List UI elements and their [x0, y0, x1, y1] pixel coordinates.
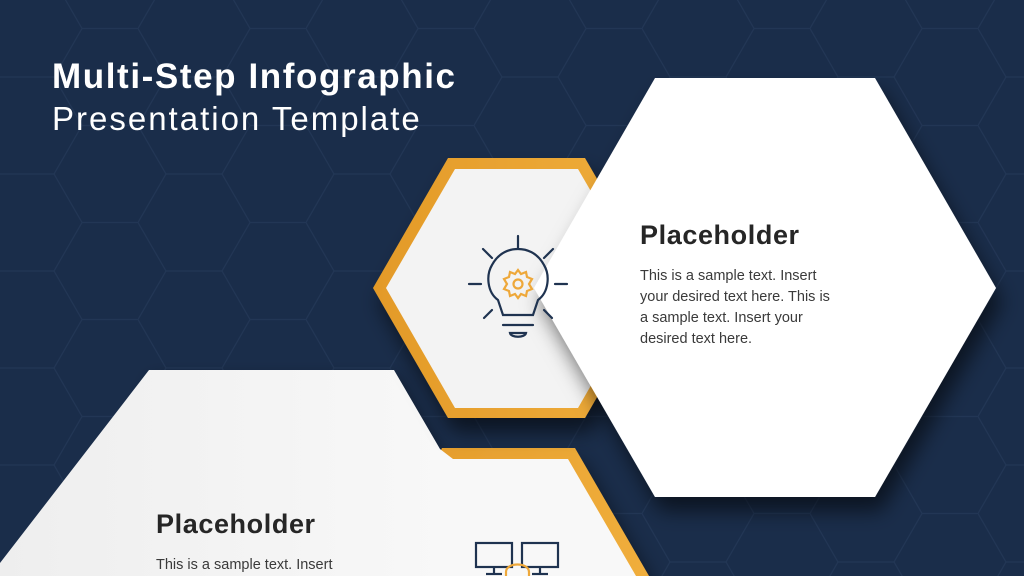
text block: bottom placeholder: [156, 509, 332, 573]
bottom-left white hexagon: [0, 370, 453, 576]
text block: bottom placeholder: This is a sample text. Insert: [156, 557, 332, 573]
text block: top placeholder: Placeholder: [640, 220, 800, 250]
text block: top placeholder: desired text here.: [640, 331, 752, 347]
title: Multi-Step Infographic: [52, 57, 457, 96]
text block: top placeholder: This is a sample text. Insert: [640, 268, 816, 284]
text block: top placeholder: a sample text. Insert your: [640, 310, 803, 326]
icon: lightbulb with gear: [469, 236, 567, 337]
title: Presentation Template: [52, 100, 422, 137]
big white hexagon: [534, 78, 996, 497]
bottom orange hexagon: [380, 448, 649, 576]
text block: top placeholder: [640, 220, 830, 347]
icon: monitors: [476, 543, 558, 576]
text block: top placeholder: your desired text here. This is: [640, 289, 830, 305]
title: [52, 57, 457, 137]
top orange hexagon: [373, 158, 660, 418]
bottom-left white hexagon shadow: [30, 370, 440, 576]
text block: bottom placeholder: Placeholder: [156, 509, 316, 539]
